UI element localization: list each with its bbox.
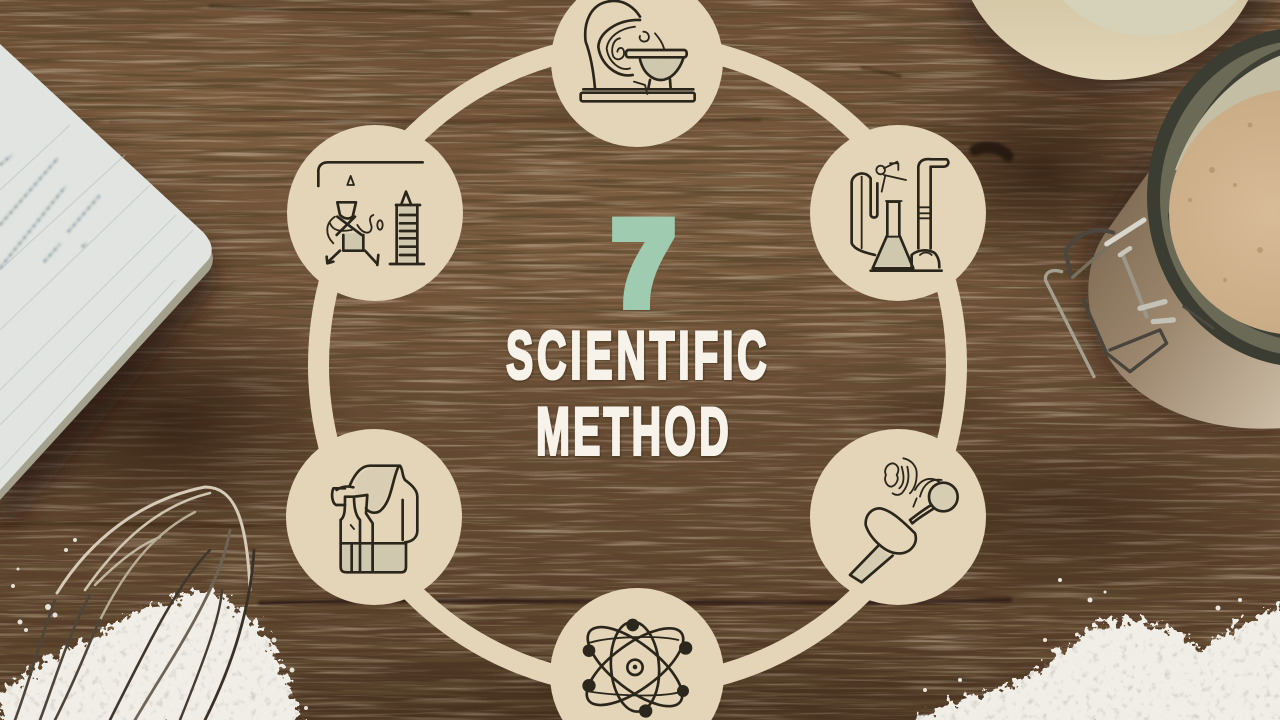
title: scientific method: SCIENTIFIC [506,317,770,393]
mixing bowl at top right [942,0,1280,95]
flour pile bottom left [0,538,308,720]
step 5 node: tasting spoon and aroma icon [810,429,986,605]
connecting ring [318,44,956,686]
notebook at left [0,44,225,540]
title: scientific method [506,317,770,469]
step 2 node: lab glassware icon [810,125,986,301]
title: scientific method: METHOD [536,393,732,469]
glass jar with batter [1045,27,1280,431]
title number 7: 7 [613,198,674,330]
wire whisk [15,487,254,720]
notebook handwriting [0,155,100,268]
step 1 node: mixer icon [551,0,723,147]
step 3 node: observation figure icon [287,125,463,301]
flour pile bottom right [900,578,1280,720]
step 6 node: atom icon [550,588,724,720]
jar metal clasp [1045,220,1213,377]
step 4 node: bottles and coat icon [286,429,462,605]
